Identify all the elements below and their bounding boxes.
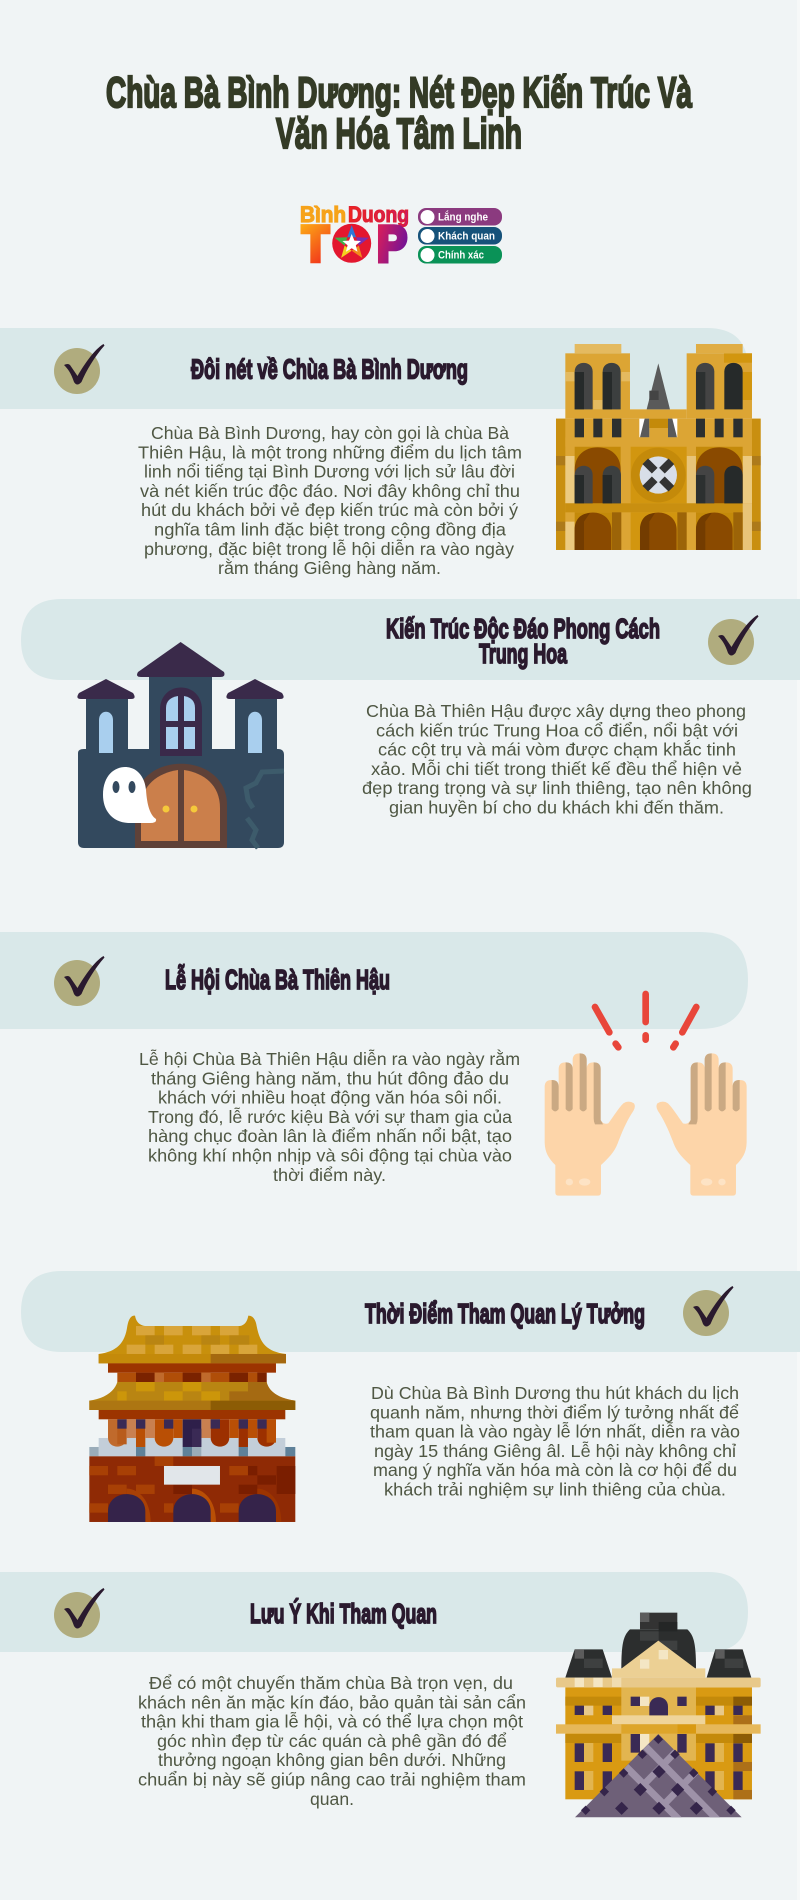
text block 4: mang ý nghĩa văn hóa mà còn là cơ hội để du: [373, 1460, 737, 1480]
text block 1: phương, đặc biệt trong lễ hội diễn ra vào ngày: [144, 538, 514, 559]
text block 1: linh nổi tiếng tại Bình Dương với lịch sử lâu đời: [144, 462, 515, 482]
text block 5: Để có một chuyến thăm chùa Bà trọn vẹn, du: [149, 1673, 513, 1693]
banner 5: [0, 1572, 748, 1652]
logo: Binh Duong TOP: Lắng nghe: [438, 210, 488, 224]
text block 4: quanh năm, nhưng thời điểm lý tưởng nhất để: [370, 1402, 739, 1422]
text block 2: Chùa Bà Thiên Hậu được xây dựng theo phong: [366, 701, 746, 721]
text block 1: và nét kiến trúc độc đáo. Nơi đây không chỉ thu: [140, 481, 520, 501]
text block 5: chuẩn bị này sẽ giúp nâng cao trải nghiệm tham: [138, 1770, 526, 1790]
text block 4: khách trải nghiệm sự linh thiêng của chùa.: [384, 1480, 726, 1500]
panel: luu y khi tham quan: [0, 1572, 761, 1817]
logo: Binh Duong TOP: Duong: [348, 202, 409, 227]
heading 1: Đôi nét về Chùa Bà Bình Dương: [191, 354, 468, 384]
text block 5: quan.: [310, 1789, 354, 1809]
panel: doi net ve chua: [0, 328, 761, 578]
text block 3: không khí nhộn nhịp và sôi động tại chùa vào: [148, 1146, 512, 1166]
text block 1: rằm tháng Giêng hàng năm.: [218, 557, 441, 578]
logo: Binh Duong TOP: T: [302, 216, 329, 272]
text block 1: hút du khách bởi vẻ đẹp kiến trúc mà còn bởi ý: [141, 500, 518, 520]
text block 1: nghĩa tâm linh đặc biệt trong cộng đồng địa: [154, 520, 506, 540]
heading 2: [386, 613, 660, 669]
heading 3: Lễ Hội Chùa Bà Thiên Hậu: [165, 964, 390, 995]
icon: raised hands: [545, 994, 747, 1196]
icon: check 2: [708, 615, 758, 665]
banner 1: [0, 328, 748, 409]
logo: Binh Duong TOP: Bình: [300, 202, 346, 227]
text block 4: [370, 1383, 740, 1500]
icon: palace: [89, 1316, 295, 1522]
text block 3: [139, 1048, 520, 1185]
text block 5: thận khi tham gia lễ hội, và có thể lựa chọn một: [141, 1711, 523, 1732]
text block 5: góc nhìn đẹp từ các quán cà phê gần đó để: [157, 1731, 507, 1751]
logo: Binh Duong TOP: P: [377, 216, 407, 272]
text block 1: [138, 423, 522, 578]
panel: kien truc doc dao: [21, 599, 800, 848]
text block 5: [138, 1673, 526, 1809]
text block 1: Chùa Bà Bình Dương, hay còn gọi là chùa Bà: [151, 423, 509, 443]
banner 3: [0, 932, 748, 1029]
panel: thoi diem tham quan: [21, 1271, 800, 1522]
icon: check 5: [54, 1588, 104, 1638]
text block 2: gian huyền bí cho du khách khi đến thăm.: [389, 798, 724, 818]
logo: Binh Duong TOP: Khách quan: [438, 230, 495, 242]
text block 3: Trong đó, lễ rước kiệu Bà với sự tham gia của: [148, 1106, 512, 1127]
logo: Binh Duong TOP: [300, 202, 502, 272]
logo: Binh Duong TOP: Chính xác: [438, 250, 484, 262]
text block 4: Dù Chùa Bà Bình Dương thu hút khách du lịch: [371, 1383, 739, 1403]
title: [106, 69, 693, 158]
text block 2: cách kiến trúc Trung Hoa cổ điển, nổi bật với: [376, 720, 738, 740]
text block 3: tháng Giêng hàng năm, thu hút đông đảo du: [151, 1068, 509, 1088]
icon: cathedral: [556, 344, 761, 550]
title: Văn Hóa Tâm Linh: [276, 110, 522, 158]
heading 4: Thời Điểm Tham Quan Lý Tưởng: [365, 1298, 645, 1329]
text block 3: hàng chục đoàn lân là điểm nhấn nổi bật, tạo: [148, 1126, 512, 1146]
text block 3: khách với nhiều hoạt động văn hóa sôi nổi.: [158, 1088, 502, 1108]
text block 2: xảo. Mỗi chi tiết trong thiết kế đều thể hiện vẻ: [371, 758, 742, 779]
text block 5: khách nên ăn mặc kín đáo, bảo quản tài sản cẩn: [138, 1692, 526, 1712]
text block 4: tham quan là vào ngày lễ lớn nhất, diễn ra vào: [370, 1421, 740, 1442]
text block 3: Lễ hội Chùa Bà Thiên Hậu diễn ra vào ngày rằm: [139, 1048, 520, 1069]
heading 5: Lưu Ý Khi Tham Quan: [250, 1598, 437, 1629]
text block 1: Thiên Hậu, là một trong những điểm du lịch tâm: [138, 442, 522, 462]
text block 4: ngày 15 tháng Giêng âl. Lễ hội này không chỉ: [374, 1440, 736, 1461]
heading 2: Trung Hoa: [479, 638, 567, 669]
text block 3: thời điểm này.: [273, 1165, 386, 1185]
icon: louvre palace: [556, 1613, 761, 1817]
heading 2: Kiến Trúc Độc Đáo Phong Cách: [386, 613, 660, 644]
icon: check 4: [683, 1286, 734, 1336]
banner 2: [21, 599, 800, 680]
text block 2: đẹp trang trọng và sự linh thiêng, tạo nên không: [362, 778, 752, 798]
icon: haunted castle: [77, 642, 284, 848]
panel: le hoi: [0, 932, 748, 1196]
text block 2: các cột trụ và mái vòm được chạm khắc tinh: [378, 739, 736, 760]
text block 5: thưởng ngoạn không gian bên dưới. Những: [158, 1750, 506, 1770]
banner 4: [21, 1271, 800, 1352]
icon: check 3: [54, 956, 104, 1006]
text block 2: [362, 701, 752, 818]
icon: check 1: [54, 344, 104, 394]
